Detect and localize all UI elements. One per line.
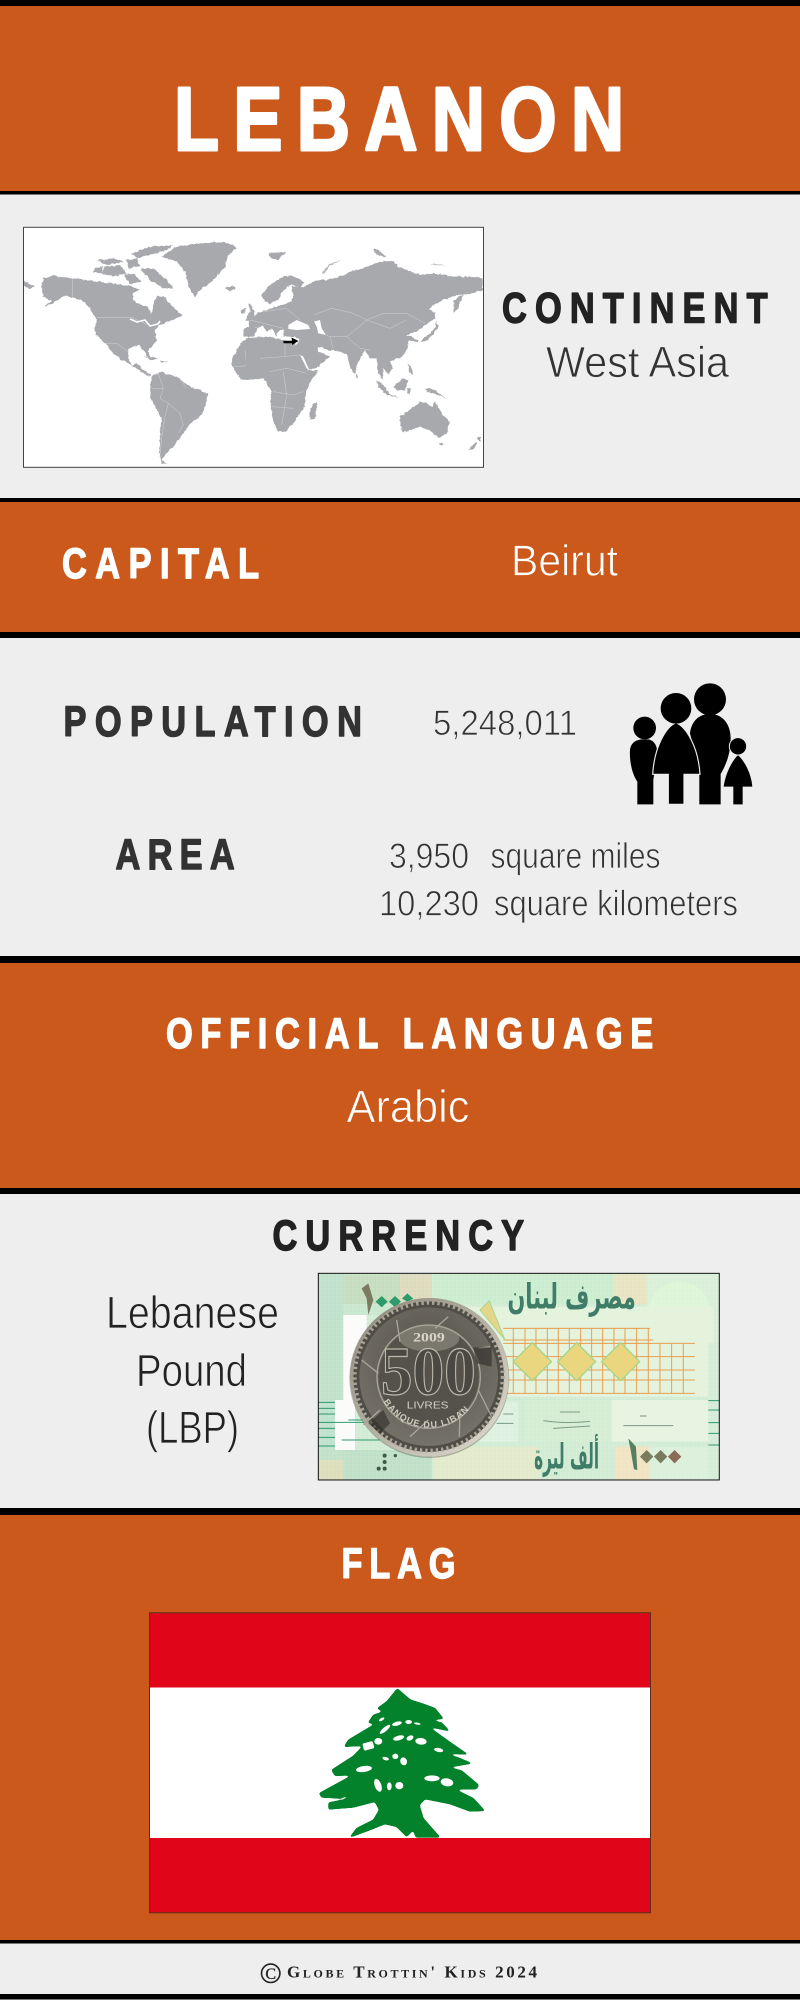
credit line: Globe Trottin' Kids 2024 xyxy=(287,1962,538,1982)
panel: population and area xyxy=(64,683,752,924)
world map xyxy=(23,227,483,467)
value: square kilometers: square kilometers xyxy=(494,882,738,924)
heading: capital: CAPITAL xyxy=(62,540,259,588)
value: Lebanese Pound (LBP): Lebanese xyxy=(106,1287,279,1338)
coin: 2009 xyxy=(413,1330,445,1344)
panel: footer xyxy=(0,1962,800,2000)
icon: arrow pointing at Lebanon xyxy=(284,338,298,345)
coin: BANQUE DU LIBAN xyxy=(384,1398,468,1428)
banknote with coin: ألف ليرة xyxy=(534,1433,599,1477)
Great Lakes xyxy=(130,319,160,326)
value: population number: 5,248,011 xyxy=(433,704,577,743)
heading: continent: CONTINENT xyxy=(502,285,768,332)
panel: currency xyxy=(106,1212,720,1480)
value: square miles: 3,950 xyxy=(389,837,469,876)
value: Lebanese Pound (LBP): Pound xyxy=(136,1345,247,1396)
panel: official language xyxy=(0,956,800,1194)
icon: copyright symbol xyxy=(262,1964,280,1983)
heading: currency: CURRENCY xyxy=(272,1212,524,1260)
banknote with coin xyxy=(318,1272,720,1480)
icon: family xyxy=(630,683,752,804)
value: Lebanese Pound (LBP): (LBP) xyxy=(146,1402,239,1453)
value: square kilometers xyxy=(379,882,738,924)
value: Arabic: Arabic xyxy=(346,1081,470,1132)
heading: official language: OFFICIAL LANGUAGE xyxy=(166,1010,653,1058)
heading: flag: FLAG xyxy=(342,1540,456,1588)
icon: cedar tree xyxy=(319,1689,485,1840)
title: LEBANON xyxy=(174,70,624,170)
value: Beirut: Beirut xyxy=(511,536,618,586)
value: square miles: square miles xyxy=(490,835,660,876)
panel: continent xyxy=(23,227,768,467)
icon: copyright symbol: C xyxy=(265,1966,276,1983)
banknote lettering: مصرف لبنان xyxy=(507,1277,636,1317)
panel: capital xyxy=(0,498,800,638)
panel: title band xyxy=(0,0,800,194)
panel: flag xyxy=(0,1508,800,1944)
flag of Lebanon xyxy=(150,1613,650,1913)
coin xyxy=(349,1298,510,1458)
orange character grid xyxy=(503,1328,695,1393)
coin: 500 xyxy=(381,1333,476,1409)
heading: population: POPULATION xyxy=(64,698,362,746)
value: West Asia: West Asia xyxy=(546,338,729,387)
value: square miles xyxy=(389,835,660,876)
coin: LIVRES xyxy=(407,1401,449,1412)
heading: area: AREA xyxy=(116,831,235,879)
value: Lebanese Pound (LBP) xyxy=(106,1287,279,1453)
value: square kilometers: 10,230 xyxy=(379,884,479,924)
